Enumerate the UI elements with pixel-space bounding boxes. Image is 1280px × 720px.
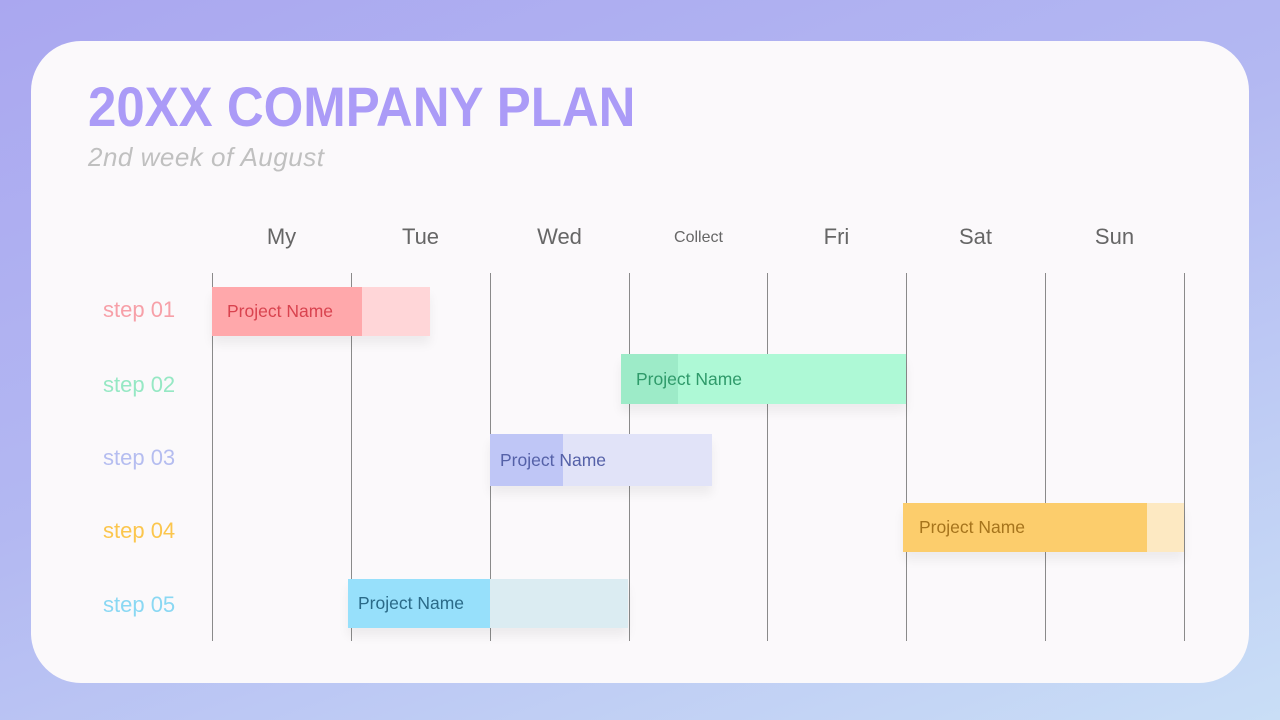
bar: step 03: Project Name (500, 450, 606, 470)
gantt chart: step 01 (103, 297, 175, 322)
gantt chart: Fri (824, 224, 849, 249)
step labels (103, 297, 175, 617)
bar: step 02: Project Name (636, 368, 742, 388)
gantt chart: Sun (1095, 224, 1134, 249)
bar: step 03 (490, 434, 712, 486)
bar: step 04: Project Name (919, 517, 1025, 537)
gantt chart: Wed (537, 224, 582, 249)
subtitle: 2nd week of August (88, 142, 324, 172)
gantt chart: Tue (402, 224, 439, 249)
gantt chart: step 02 (103, 372, 175, 397)
day headers (267, 224, 1134, 249)
gantt chart: My (267, 224, 296, 249)
bar: step 05: Project Name (358, 593, 464, 613)
gantt chart: step 03 (103, 445, 175, 470)
gantt chart: Collect (674, 229, 723, 246)
gantt chart: Sat (959, 224, 992, 249)
bar: step 01: Project Name (227, 301, 333, 321)
gantt chart: step 04 (103, 518, 175, 543)
title: 20XX COMPANY PLAN (88, 75, 635, 138)
bar: step 04 (903, 503, 1184, 552)
bar: step 05 (348, 579, 628, 628)
bar: step 01 (212, 287, 430, 336)
bar: step 02 (621, 354, 906, 404)
gantt chart: step 05 (103, 592, 175, 617)
